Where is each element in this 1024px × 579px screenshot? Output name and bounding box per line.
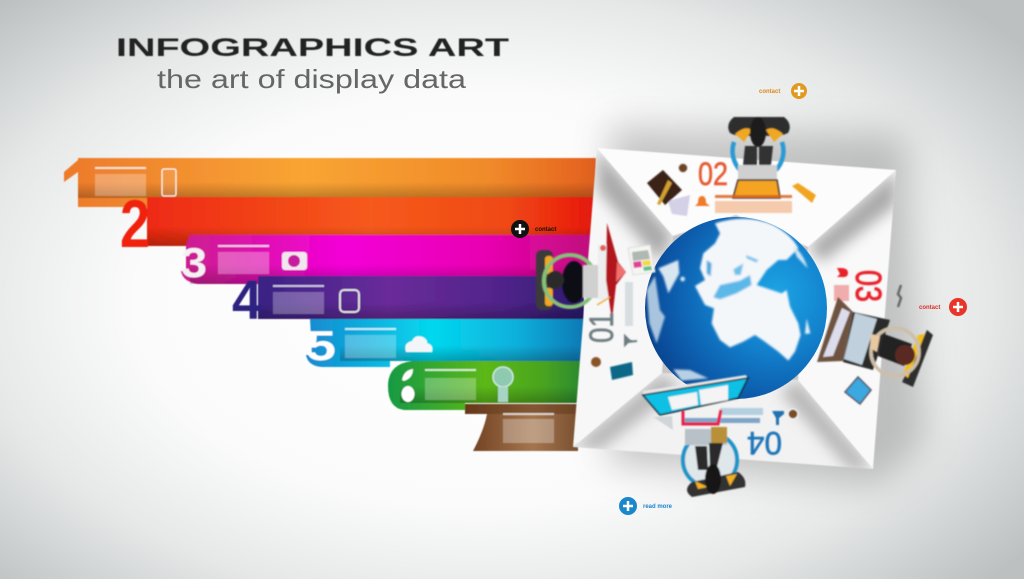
ring [733, 142, 783, 170]
callout: black plus [511, 220, 556, 238]
callout: blue plus: read more [643, 504, 673, 510]
ring [683, 433, 737, 487]
number 02: 02 [698, 156, 728, 192]
ribbon 3 magenta: 3 [181, 239, 207, 286]
ribbon 5 cyan [306, 319, 586, 369]
head [546, 271, 564, 289]
envelope panel [573, 148, 896, 470]
note card [628, 245, 655, 275]
Antarctica [673, 369, 708, 381]
Greenland [658, 260, 679, 293]
number 01: 01 [583, 312, 621, 343]
coffee cup [678, 163, 688, 173]
callout: orange plus: contact [759, 89, 780, 95]
text lines [715, 195, 792, 198]
workstation 01 [536, 223, 655, 380]
continents: Europe and Africa [695, 219, 801, 361]
icon: cloud [405, 336, 432, 352]
Madagascar [805, 318, 810, 334]
laptop [817, 297, 890, 370]
ribbon 7 brown [465, 404, 578, 451]
coffee cup [788, 409, 798, 419]
text lines [720, 408, 763, 415]
body [562, 261, 586, 303]
callout: red plus: contact [919, 305, 940, 311]
workstation 02 [647, 117, 816, 216]
workstation 04 [643, 375, 798, 497]
number 04: 04 [747, 425, 782, 461]
callout: black plus: contact [535, 227, 556, 233]
ribbon 4 purple: 4 [232, 268, 262, 331]
ribbon 5 cyan: 5 [306, 322, 336, 369]
icon: light bulb [493, 367, 513, 402]
keyboard [685, 429, 727, 445]
ribbon 1 orange [64, 158, 596, 207]
phone [792, 183, 816, 203]
callout: red plus [919, 298, 967, 316]
envelope drop shadow [610, 125, 925, 485]
monitor stand [598, 245, 608, 300]
head [705, 464, 721, 494]
workstation 03 [817, 268, 933, 404]
callout: orange plus [759, 83, 807, 99]
left flap [573, 148, 673, 447]
arms and book [743, 146, 773, 165]
monitor [643, 375, 748, 415]
globe [645, 217, 827, 399]
ribbon 6 green [388, 361, 582, 410]
ribbon 3 magenta [181, 235, 590, 286]
right flap [798, 170, 896, 469]
head [750, 117, 766, 147]
colored ribbons [64, 158, 596, 451]
red screen [606, 223, 626, 320]
Mediterranean [713, 275, 752, 299]
user icon [772, 411, 784, 425]
grey triangle [653, 416, 673, 430]
arms and book [695, 443, 723, 470]
laptop [733, 180, 780, 198]
body [878, 334, 912, 366]
Americas [647, 276, 665, 343]
icon: phone [162, 169, 176, 196]
ribbon 2 red: 2 [120, 186, 150, 262]
callout: blue plus [619, 497, 673, 515]
ring [871, 328, 919, 376]
tablet and card [647, 170, 690, 216]
chair [687, 472, 745, 497]
user icon [837, 268, 848, 277]
red bracket [683, 410, 721, 424]
text lines [834, 285, 849, 301]
number 03: 03 [848, 270, 889, 302]
tablet [845, 377, 871, 404]
tablet [610, 362, 633, 380]
ribbon 2 red [120, 186, 594, 262]
coffee cup [591, 357, 601, 367]
pen [597, 297, 610, 305]
Arabia sliver [793, 246, 808, 268]
icon: tablet [340, 290, 359, 312]
keyboard [738, 165, 777, 180]
title [116, 34, 509, 94]
bottom flap [573, 373, 873, 469]
text lines [625, 282, 633, 326]
top flap [597, 148, 896, 247]
user icon [695, 196, 710, 206]
user icon [625, 336, 637, 345]
subtitle: the art of display data [157, 64, 467, 94]
keyboard [583, 265, 598, 298]
ring [544, 255, 596, 307]
chair [728, 117, 790, 136]
icon: camera [282, 252, 307, 270]
head [895, 345, 915, 365]
chair [902, 330, 933, 387]
chain icon [898, 285, 901, 307]
ribbon 4 purple [232, 268, 584, 331]
arm [870, 334, 880, 352]
heading: infographics art: INFOGRAPHICS ART [116, 34, 509, 62]
chair [536, 250, 553, 310]
